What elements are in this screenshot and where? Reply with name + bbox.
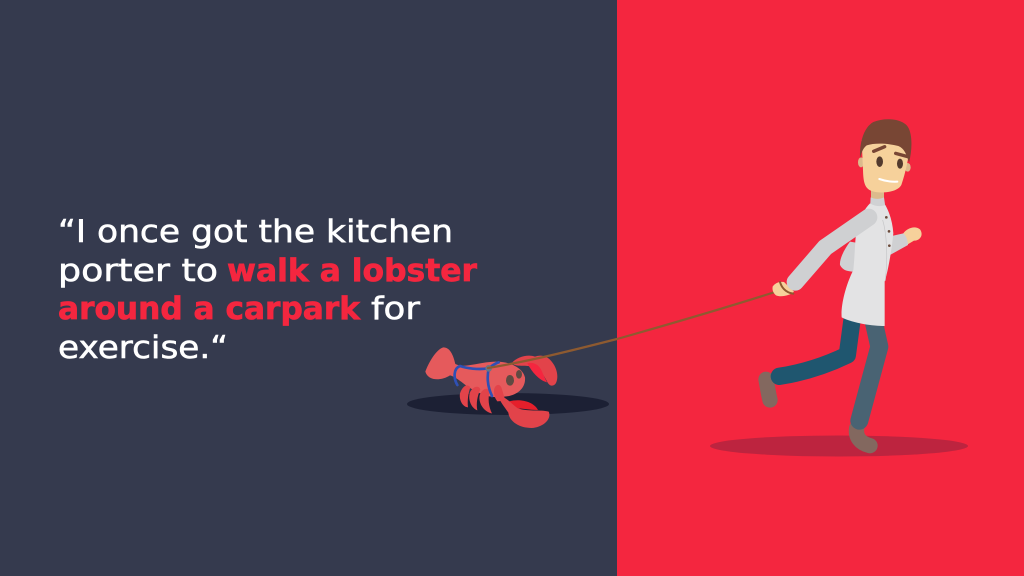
back leg: [779, 320, 852, 376]
icon: lobster: [425, 347, 557, 428]
coat buttons: [885, 216, 891, 247]
quote text: [58, 214, 478, 366]
lobster tail and body: [425, 347, 525, 397]
eyes: [876, 156, 903, 169]
panel: red right background: [617, 0, 1024, 576]
man shadow: [710, 436, 968, 456]
near hand: [772, 282, 794, 296]
leash rope: [488, 292, 775, 368]
lobster eyes: [506, 370, 522, 386]
face: [862, 140, 909, 192]
coat seam: [883, 220, 887, 281]
lobster back claw pincer: [527, 363, 547, 382]
ears: [858, 157, 864, 167]
quote text: for: [371, 291, 420, 327]
coat: [842, 203, 893, 326]
panel: dark left background: [0, 0, 617, 576]
far arm: [890, 233, 908, 255]
lobster front claw pincer: [509, 400, 538, 410]
harness ring: [485, 365, 492, 372]
eyebrows: [874, 147, 908, 157]
man legs: [766, 320, 879, 446]
far hand: [903, 227, 922, 245]
near arm: [795, 217, 869, 282]
back foot: [766, 379, 770, 400]
quote text: “I once got the kitchen: [58, 214, 453, 250]
lobster harness: [455, 362, 499, 396]
lobster legs: [460, 385, 505, 413]
front leg: [859, 320, 879, 421]
front foot: [856, 428, 870, 446]
quote text: around a carpark: [58, 291, 361, 327]
lobster shadow: [407, 393, 609, 415]
hair: [860, 119, 911, 163]
quote text: walk a lobster: [227, 253, 478, 289]
back elbow patch: [840, 242, 860, 272]
quote text: exercise.“: [58, 330, 228, 366]
lobster back claw: [512, 356, 557, 386]
neck: [871, 188, 884, 200]
collar: [870, 197, 885, 209]
mouth: [879, 179, 897, 182]
lobster front claw: [499, 395, 549, 428]
quote text: porter to: [58, 253, 218, 289]
man upper body: [772, 119, 922, 326]
wrist bracelet: [780, 282, 793, 294]
